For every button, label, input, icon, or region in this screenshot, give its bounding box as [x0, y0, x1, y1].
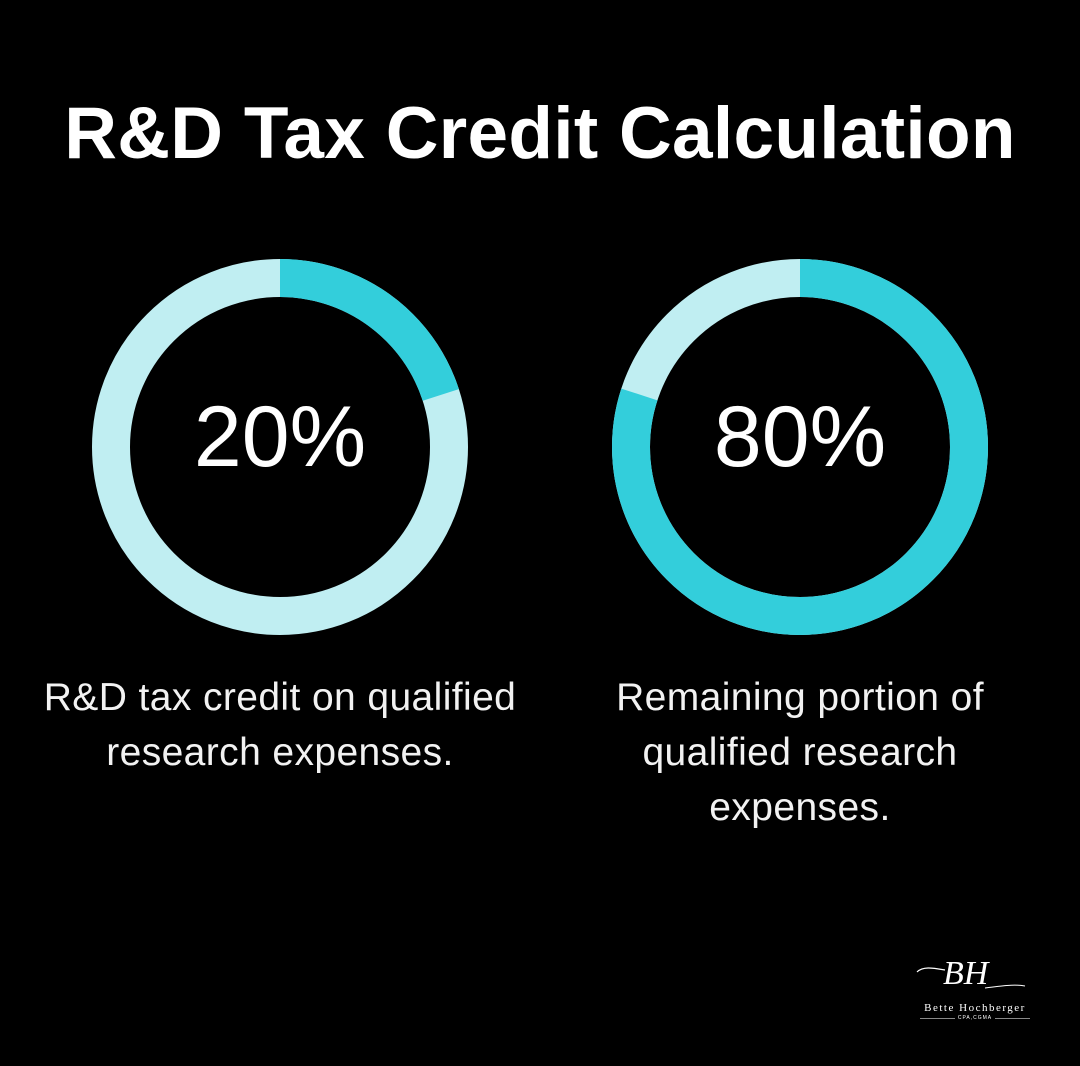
logo	[916, 955, 1030, 1021]
caption: right: expenses.	[709, 786, 891, 829]
caption: right	[616, 676, 984, 829]
logo: CPA,CGMA	[958, 1015, 992, 1021]
donut chart: 80%	[612, 259, 988, 635]
percentage: 80%: 80%	[714, 389, 886, 485]
donut chart: 20%	[92, 259, 468, 635]
caption: left	[44, 676, 516, 774]
logo: BH	[943, 955, 991, 992]
percentage: 20%: 20%	[194, 389, 366, 485]
caption: right: qualified research	[642, 731, 958, 774]
caption: right: Remaining portion of	[616, 676, 984, 719]
title: R&D Tax Credit Calculation	[64, 93, 1016, 174]
logo: Bette Hochberger	[924, 1002, 1026, 1014]
caption: left: R&D tax credit on qualified	[44, 676, 516, 719]
caption: left: research expenses.	[106, 731, 454, 774]
